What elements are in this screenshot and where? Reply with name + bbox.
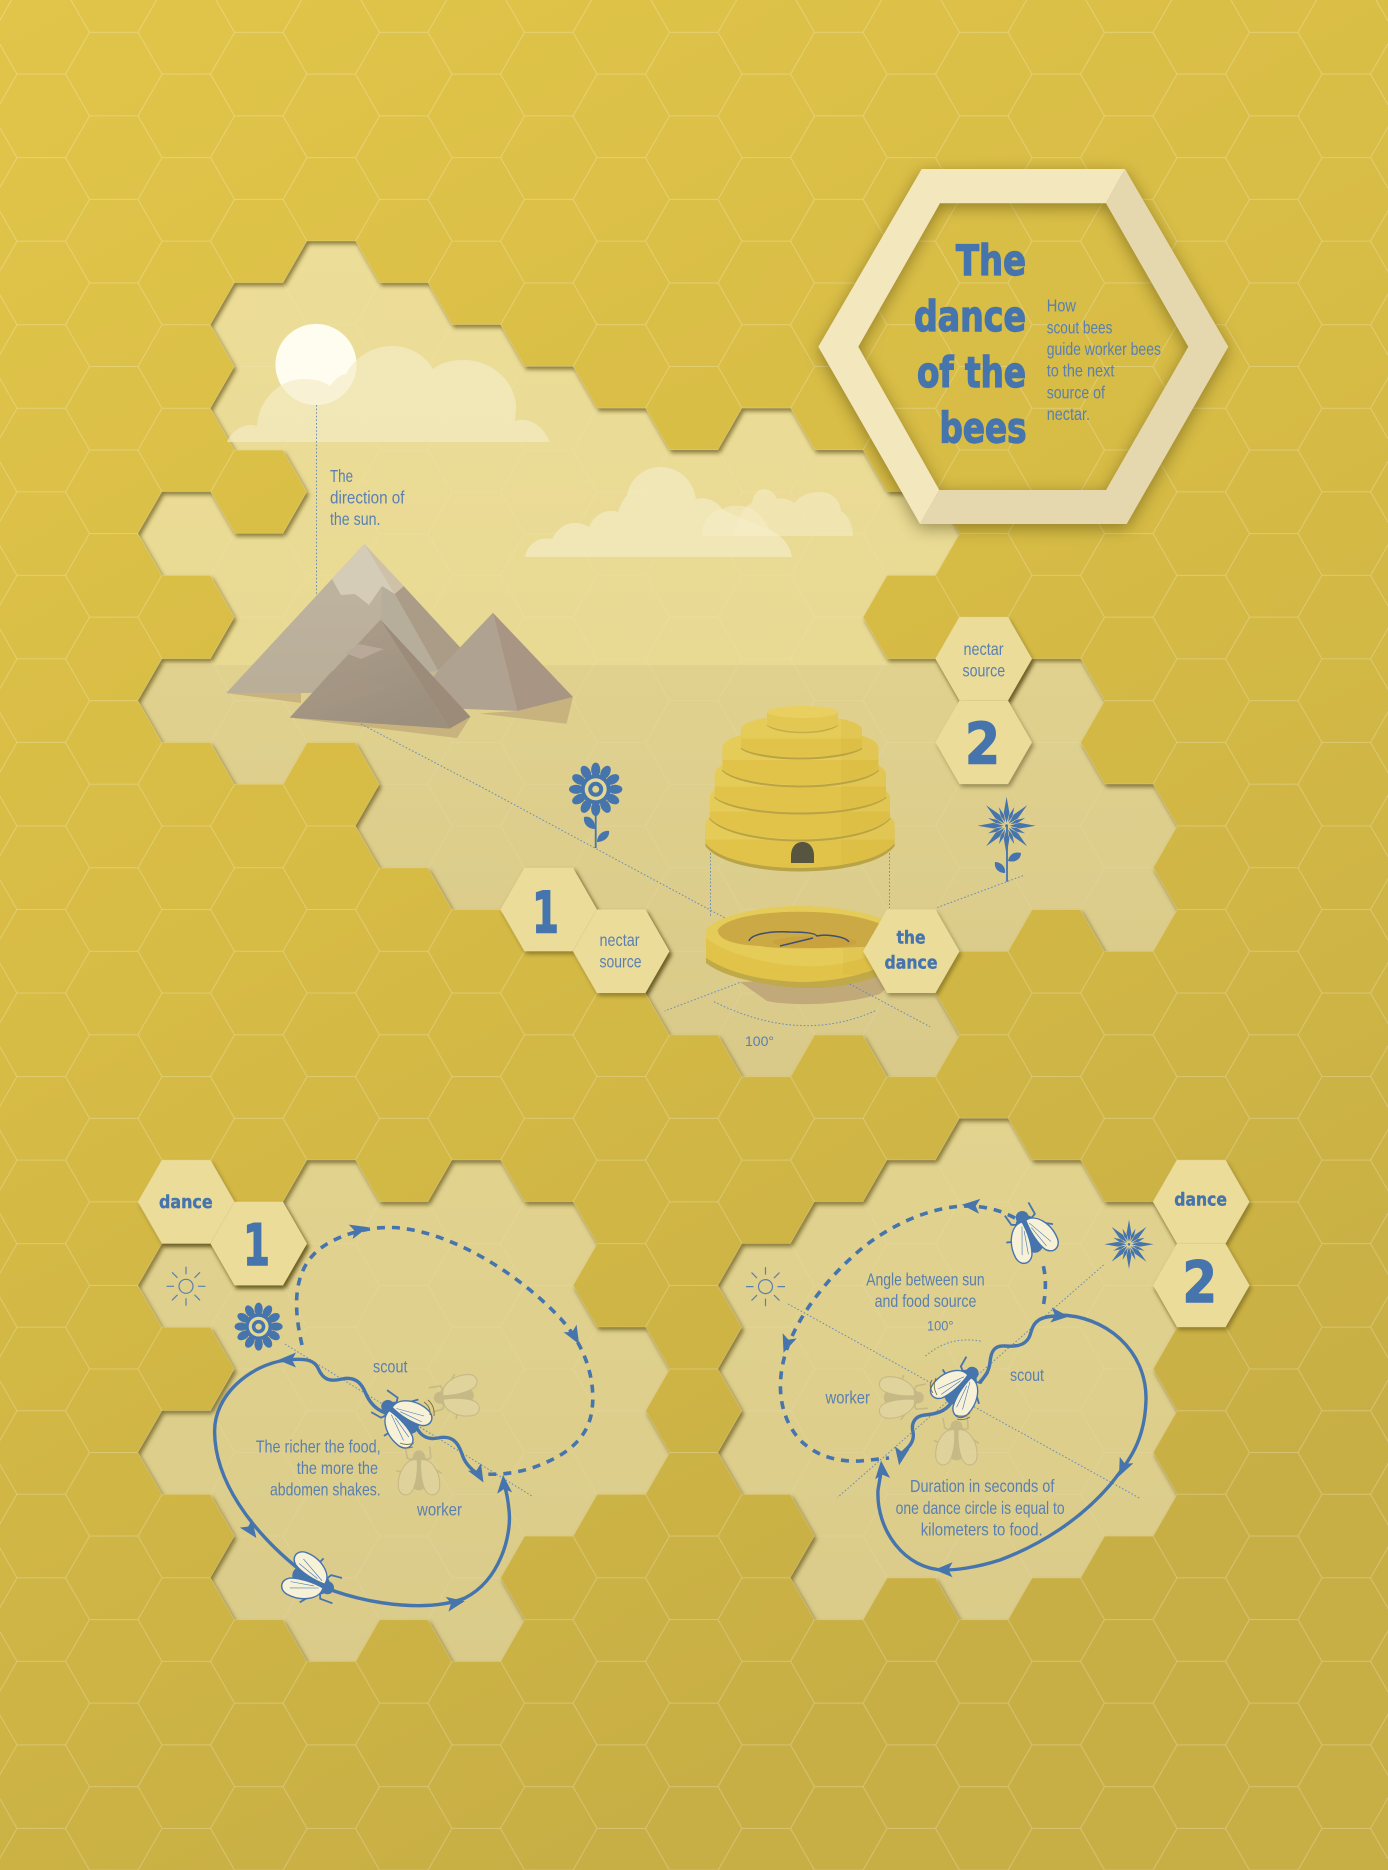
subtitle text: nectar. [1047,404,1090,424]
subtitle text: to the next [1047,361,1115,381]
badge: the dance: dance [884,952,938,973]
arrowheads [776,1197,1133,1577]
subtitle text: How [1047,296,1076,316]
cloud: small right [703,489,853,536]
dance 1 hexagon cut-out [138,1160,670,1661]
text: the direction of the sun [330,466,405,529]
labels and notes [825,1270,1065,1539]
badge: number 1: 1 [243,1213,270,1279]
panel: dance 1 [138,1160,670,1661]
badge: dance [138,1160,234,1244]
labels and notes: and food source [875,1291,976,1311]
worker bees [396,1372,480,1495]
solid loop path [878,1315,1146,1570]
panel: landscape scene [138,241,1177,1077]
axis line [285,1344,532,1496]
badge: number 1: 1 [532,880,559,946]
scout bee [363,1380,437,1453]
labels and note: scout [373,1356,408,1376]
cloud: behind sun [227,346,550,442]
arrowheads [240,1220,586,1612]
vibration marks [400,1400,434,1448]
badge: the dance: the [896,927,926,948]
waggle run path [901,1316,1058,1454]
badge: nectar source 1 label: source [600,952,642,972]
labels and note [256,1356,462,1519]
badge: number 2: 2 [1182,1250,1217,1316]
icon: sun [166,1267,206,1306]
axis lines and angle arc [788,1265,1139,1498]
badge: dance: dance [159,1192,213,1213]
badge: dance: dance [1174,1190,1227,1211]
badge: dance [1153,1160,1250,1244]
text: the direction of the sun: direction of [330,487,405,507]
dashed return path [297,1227,593,1474]
badge: nectar source 2 label: nectar [964,639,1004,659]
labels and notes: kilometers to food. [921,1519,1043,1539]
landscape hexagon cut-out [138,241,1177,1077]
badge: number 2 [936,701,1032,784]
badge: the dance [863,909,960,993]
worker bees [879,1375,979,1465]
icon: sun [746,1267,785,1306]
labels and notes: scout [1010,1365,1044,1385]
title text: dance [914,292,1026,341]
illustration: mountains [226,544,573,738]
waggle run path [289,1359,478,1474]
labels and notes: Duration in seconds of [910,1476,1055,1496]
labels and notes: 100° [927,1317,954,1333]
title text [914,236,1026,453]
badge: nectar source 1 label [573,909,670,993]
title block [818,169,1228,524]
hexagon frame [818,169,1228,524]
sun direction line [316,405,318,610]
icon: flower [235,1303,283,1351]
lines and arc below dish [665,983,930,1027]
icon: sun [275,324,357,405]
labels and notes: worker [825,1388,870,1408]
labels and note: the more the [297,1458,378,1478]
dance 2 hexagon cut-out [718,1118,1177,1620]
badge: nectar source 2 label: source [962,661,1005,681]
circling bee [995,1197,1063,1267]
labels and notes: Angle between sun [866,1270,985,1290]
sun angle line [361,724,726,918]
illustration: beehive [705,700,901,875]
guide lines hive to dish [710,853,890,917]
title text: of the [917,348,1026,397]
badge: number 2: 2 [965,711,1000,777]
labels and note: worker [416,1499,462,1519]
text: the direction of the sun: The [330,466,353,486]
subtitle text: scout bees [1047,317,1113,337]
badge: number 1 [500,868,597,951]
subtitle text [1047,296,1161,424]
badge: nectar source 1 label: nectar [600,930,640,950]
labels and notes: one dance circle is equal to [896,1498,1065,1518]
scout bee [925,1349,998,1422]
title text: The [956,236,1026,285]
badge: number 2 [1153,1244,1250,1327]
panel: dance 2 [718,1118,1250,1620]
solid loop path [215,1360,509,1606]
label: 100 degrees: 100° [745,1033,774,1049]
labels and note: The richer the food, [256,1437,381,1457]
subtitle text: source of [1047,382,1105,402]
icon: flower source one [569,763,622,848]
icon: star flower [1104,1220,1154,1269]
labels and note: abdomen shakes. [270,1480,381,1500]
text: the direction of the sun: the sun. [330,509,380,529]
title text: bees [940,404,1026,453]
badge: number 1 [210,1202,307,1285]
badge: nectar source 2 label [936,617,1032,701]
cloud: middle [525,467,792,557]
vibration marks [930,1378,970,1420]
icon: flower source two [978,797,1036,882]
dashed return path [780,1206,1045,1461]
subtitle text: guide worker bees [1047,339,1161,359]
line to source two [936,876,1023,908]
circling bee [278,1547,348,1615]
illustration: dance floor dish [706,906,900,1004]
